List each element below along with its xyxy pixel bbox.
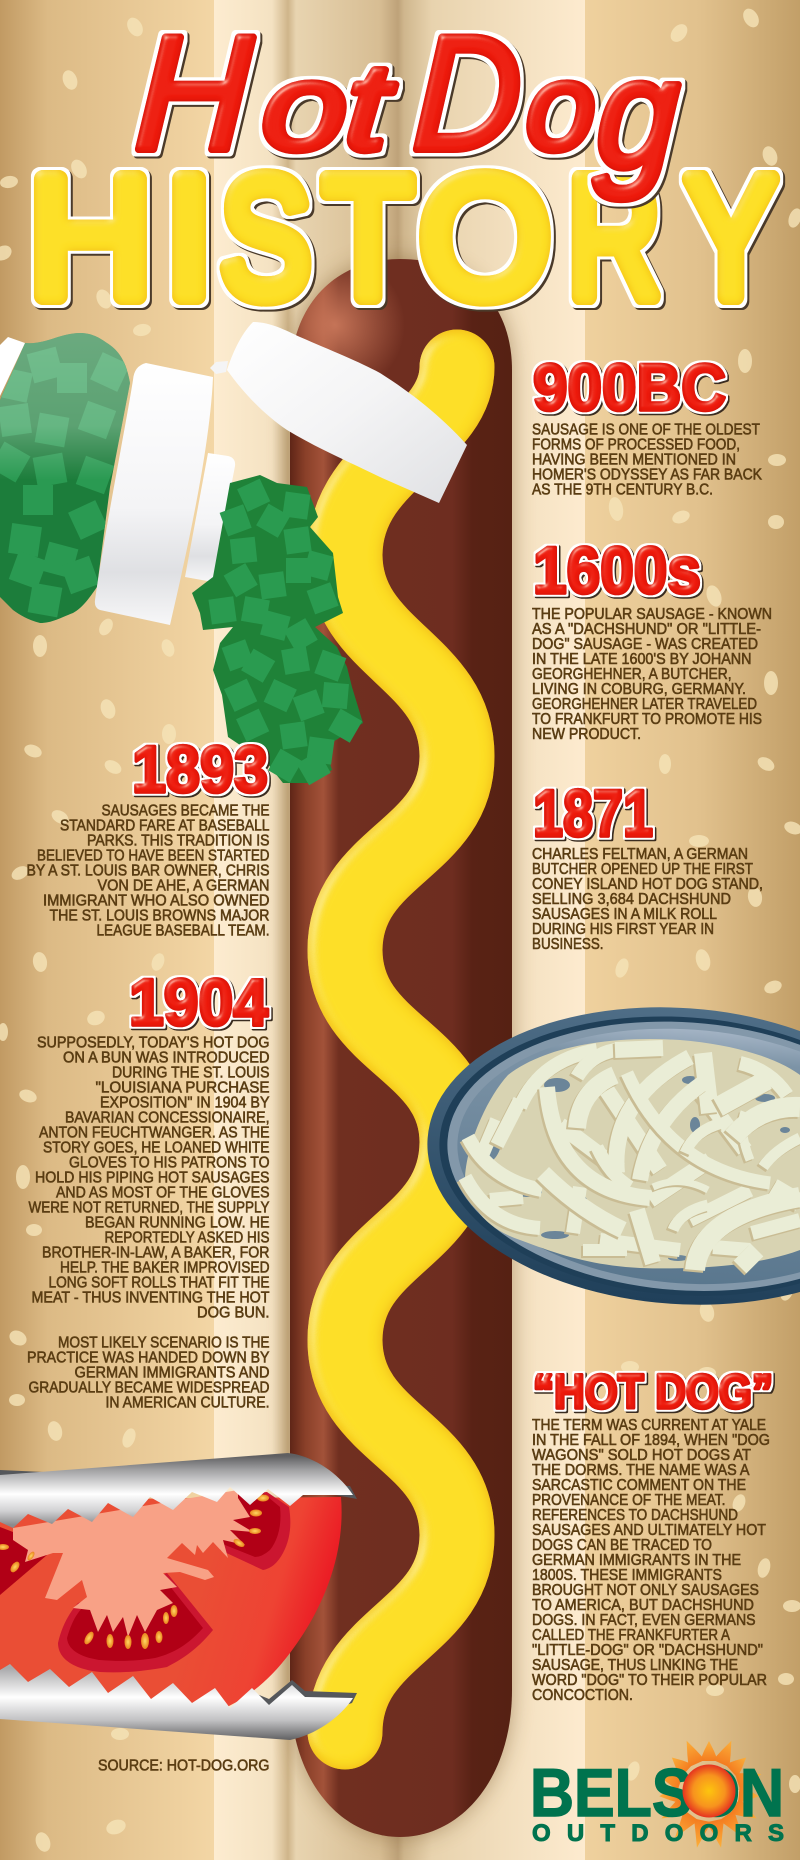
mustard squiggle bbox=[345, 367, 457, 1732]
title: History: I bbox=[166, 143, 213, 333]
body text: GERMAN IMMIGRANTS AND bbox=[74, 1364, 270, 1381]
title: Hot Dog: H bbox=[132, 3, 256, 184]
onion mound base bbox=[465, 1039, 800, 1268]
body text bbox=[532, 422, 763, 498]
sausage bbox=[280, 250, 512, 1837]
body text: HOLD HIS PIPING HOT SAUSAGES bbox=[35, 1169, 270, 1186]
timeline: 900BC bbox=[532, 350, 763, 498]
timeline: 1600s bbox=[532, 533, 772, 743]
body text: TO FRANKFURT TO PROMOTE HIS bbox=[532, 711, 762, 728]
heading: 1904 bbox=[129, 965, 268, 1039]
body text: PRACTICE WAS HANDED DOWN BY bbox=[27, 1349, 270, 1366]
heading: 1893 bbox=[132, 732, 268, 806]
body text bbox=[532, 846, 763, 953]
body text: AS THE 9TH CENTURY B.C. bbox=[532, 482, 713, 498]
body text: HELP. THE BAKER IMPROVISED bbox=[60, 1259, 270, 1276]
body text bbox=[27, 1034, 270, 1411]
body text: 1800S. THESE IMMIGRANTS bbox=[532, 1567, 722, 1584]
body text: BAVARIAN CONCESSIONAIRE, bbox=[65, 1109, 270, 1126]
body text: NEW PRODUCT. bbox=[532, 726, 641, 743]
jar lid bbox=[227, 322, 467, 503]
body text: IN THE FALL OF 1894, WHEN "DOG bbox=[532, 1432, 770, 1449]
logo sun rays bbox=[654, 1737, 764, 1850]
body text: LIVING IN COBURG, GERMANY. bbox=[532, 681, 746, 698]
onion strips bbox=[465, 1048, 800, 1270]
lower tong bbox=[0, 1664, 353, 1740]
body text: THE TERM WAS CURRENT AT YALE bbox=[532, 1417, 766, 1434]
body text: PARKS. THIS TRADITION IS bbox=[87, 832, 270, 850]
body text: STORY GOES, HE LOANED WHITE bbox=[43, 1139, 270, 1156]
body text: FORMS OF PROCESSED FOOD, bbox=[532, 436, 740, 454]
title: History: R bbox=[568, 143, 660, 333]
logo sun disc bbox=[682, 1764, 736, 1818]
timeline: 1893 bbox=[26, 732, 270, 940]
body text: LONG SOFT ROLLS THAT FIT THE bbox=[48, 1274, 270, 1291]
body text: BROTHER-IN-LAW, A BAKER, FOR bbox=[42, 1244, 270, 1261]
body text: "LITTLE-DOG" OR "DACHSHUND" bbox=[532, 1642, 763, 1659]
body text: SAUSAGES IN A MILK ROLL bbox=[532, 906, 717, 923]
body text: DOG BUN. bbox=[197, 1304, 270, 1321]
body text: STANDARD FARE AT BASEBALL bbox=[60, 818, 270, 834]
body text: SAUSAGES AND ULTIMATELY HOT bbox=[532, 1522, 766, 1539]
body text: VON DE AHE, A GERMAN bbox=[98, 878, 270, 894]
body text: THE ST. LOUIS BROWNS MAJOR bbox=[50, 908, 270, 924]
body text: IN THE LATE 1600'S BY JOHANN bbox=[532, 651, 752, 668]
body text: REPORTEDLY ASKED HIS bbox=[104, 1229, 270, 1246]
body text: WAGONS" SOLD HOT DOGS AT bbox=[532, 1447, 752, 1464]
tomato seeds bbox=[0, 1494, 269, 1649]
body text: SUPPOSEDLY, TODAY'S HOT DOG bbox=[37, 1034, 270, 1051]
body text: REFERENCES TO DACHSHUND bbox=[532, 1507, 738, 1524]
body text: GEORGHEHNER LATER TRAVELED bbox=[532, 696, 757, 713]
body text: BEGAN RUNNING LOW. HE bbox=[85, 1214, 270, 1231]
body text: BELIEVED TO HAVE BEEN STARTED bbox=[37, 848, 270, 864]
title: History: Y bbox=[686, 143, 776, 333]
body text: PROVENANCE OF THE MEAT. bbox=[532, 1492, 726, 1509]
title: History: H bbox=[29, 143, 152, 333]
body text: THE DORMS. THE NAME WAS A bbox=[532, 1462, 750, 1479]
title: Hot Dog bbox=[132, 3, 684, 200]
timeline: 1871 bbox=[532, 776, 763, 953]
body text: CONEY ISLAND HOT DOG STAND, bbox=[532, 876, 763, 893]
source note: SOURCE: HOT-DOG.ORG bbox=[98, 1758, 270, 1774]
title: History: T bbox=[324, 143, 413, 333]
body text: MOST LIKELY SCENARIO IS THE bbox=[58, 1334, 270, 1351]
body text: TO AMERICA, BUT DACHSHUND bbox=[532, 1597, 754, 1614]
body text: DOGS. IN FACT, EVEN GERMANS bbox=[532, 1612, 756, 1629]
timeline: 1904 bbox=[27, 965, 270, 1411]
body text: GRADUALLY BECAME WIDESPREAD bbox=[28, 1379, 270, 1396]
body text: CALLED THE FRANKFURTER A bbox=[532, 1627, 731, 1644]
tomato in tongs bbox=[0, 1453, 357, 1740]
body text bbox=[532, 606, 772, 743]
relish inside jar bbox=[0, 330, 135, 630]
body text: LEAGUE BASEBALL TEAM. bbox=[96, 922, 270, 940]
body text: GLOVES TO HIS PATRONS TO bbox=[69, 1154, 270, 1171]
tomato core bbox=[13, 1490, 253, 1637]
plate of onions bbox=[417, 991, 800, 1321]
body text: HOMER'S ODYSSEY AS FAR BACK bbox=[532, 466, 763, 484]
body text: BROUGHT NOT ONLY SAUSAGES bbox=[532, 1582, 759, 1599]
onion mound gaps bbox=[486, 1076, 790, 1261]
body text: AS A "DACHSHUND" OR "LITTLE- bbox=[532, 621, 761, 638]
title: History: S bbox=[221, 143, 311, 333]
body text: ANTON FEUCHTWANGER. AS THE bbox=[39, 1124, 270, 1141]
heading: 900BC bbox=[533, 350, 726, 424]
body text: DOGS CAN BE TRACED TO bbox=[532, 1537, 712, 1554]
heading: 1871 bbox=[533, 776, 653, 850]
logo: Belson Outdoors bbox=[530, 1737, 784, 1850]
relish jar bbox=[0, 322, 467, 630]
body text: MEAT - THUS INVENTING THE HOT bbox=[32, 1289, 270, 1306]
body text: EXPOSITION" IN 1904 BY bbox=[100, 1094, 270, 1111]
body text: BUTCHER OPENED UP THE FIRST bbox=[532, 861, 753, 878]
body text bbox=[26, 802, 270, 940]
tomato chambers bbox=[0, 1492, 290, 1672]
body text: GEORGHEHNER, A BUTCHER, bbox=[532, 666, 732, 683]
heading: “HOT DOG” bbox=[533, 1366, 773, 1419]
body text: WERE NOT RETURNED, THE SUPPLY bbox=[28, 1199, 270, 1216]
body text: SAUSAGE IS ONE OF THE OLDEST bbox=[532, 422, 760, 438]
body text: CONCOCTION. bbox=[532, 1687, 633, 1704]
body text: BY A ST. LOUIS BAR OWNER, CHRIS bbox=[26, 862, 270, 880]
body text: AND AS MOST OF THE GLOVES bbox=[56, 1184, 270, 1201]
tomato flesh bbox=[0, 1497, 342, 1707]
body text: WORD "DOG" TO THEIR POPULAR bbox=[532, 1672, 767, 1689]
jar neck bbox=[185, 453, 235, 582]
body text: IMMIGRANT WHO ALSO OWNED bbox=[43, 892, 270, 910]
upper tong bbox=[0, 1453, 353, 1528]
body text: ON A BUN WAS INTRODUCED bbox=[63, 1049, 270, 1066]
body text: SAUSAGE, THUS LINKING THE bbox=[532, 1657, 738, 1674]
body text: SELLING 3,684 DACHSHUND bbox=[532, 891, 731, 908]
body text: THE POPULAR SAUSAGE - KNOWN bbox=[532, 606, 772, 623]
body text: "LOUISIANA PURCHASE bbox=[96, 1079, 270, 1096]
jar rim left bbox=[0, 337, 25, 396]
body text: DOG" SAUSAGE - WAS CREATED bbox=[532, 636, 758, 653]
body text bbox=[532, 1417, 770, 1704]
logo tagline: OUTDOORS bbox=[532, 1820, 784, 1847]
title: Hot Dog: g bbox=[593, 27, 682, 200]
body text: IN AMERICAN CULTURE. bbox=[106, 1394, 270, 1411]
plate bbox=[417, 991, 800, 1321]
body text: DURING HIS FIRST YEAR IN bbox=[532, 921, 714, 938]
body text: SAUSAGES BECAME THE bbox=[102, 802, 270, 820]
body text: HAVING BEEN MENTIONED IN bbox=[532, 452, 736, 468]
body text: SARCASTIC COMMENT ON THE bbox=[532, 1477, 746, 1494]
body text: CHARLES FELTMAN, A GERMAN bbox=[532, 846, 748, 863]
body text: GERMAN IMMIGRANTS IN THE bbox=[532, 1552, 741, 1569]
upper tong back edge bbox=[0, 1470, 357, 1522]
heading: 1600s bbox=[533, 533, 701, 607]
title: Hot Dog: D bbox=[410, 3, 526, 184]
title: Hot Dog: o bbox=[524, 38, 599, 175]
title: History: O bbox=[420, 143, 550, 333]
title: Hot Dog: ot bbox=[260, 38, 398, 175]
body text: DURING THE ST. LOUIS bbox=[112, 1064, 270, 1081]
relish pile bbox=[192, 475, 363, 785]
jar body ring bbox=[95, 363, 213, 625]
timeline: "Hot Dog" bbox=[532, 1366, 773, 1704]
body text: BUSINESS. bbox=[532, 936, 604, 953]
lower tong back edge bbox=[222, 1680, 357, 1720]
